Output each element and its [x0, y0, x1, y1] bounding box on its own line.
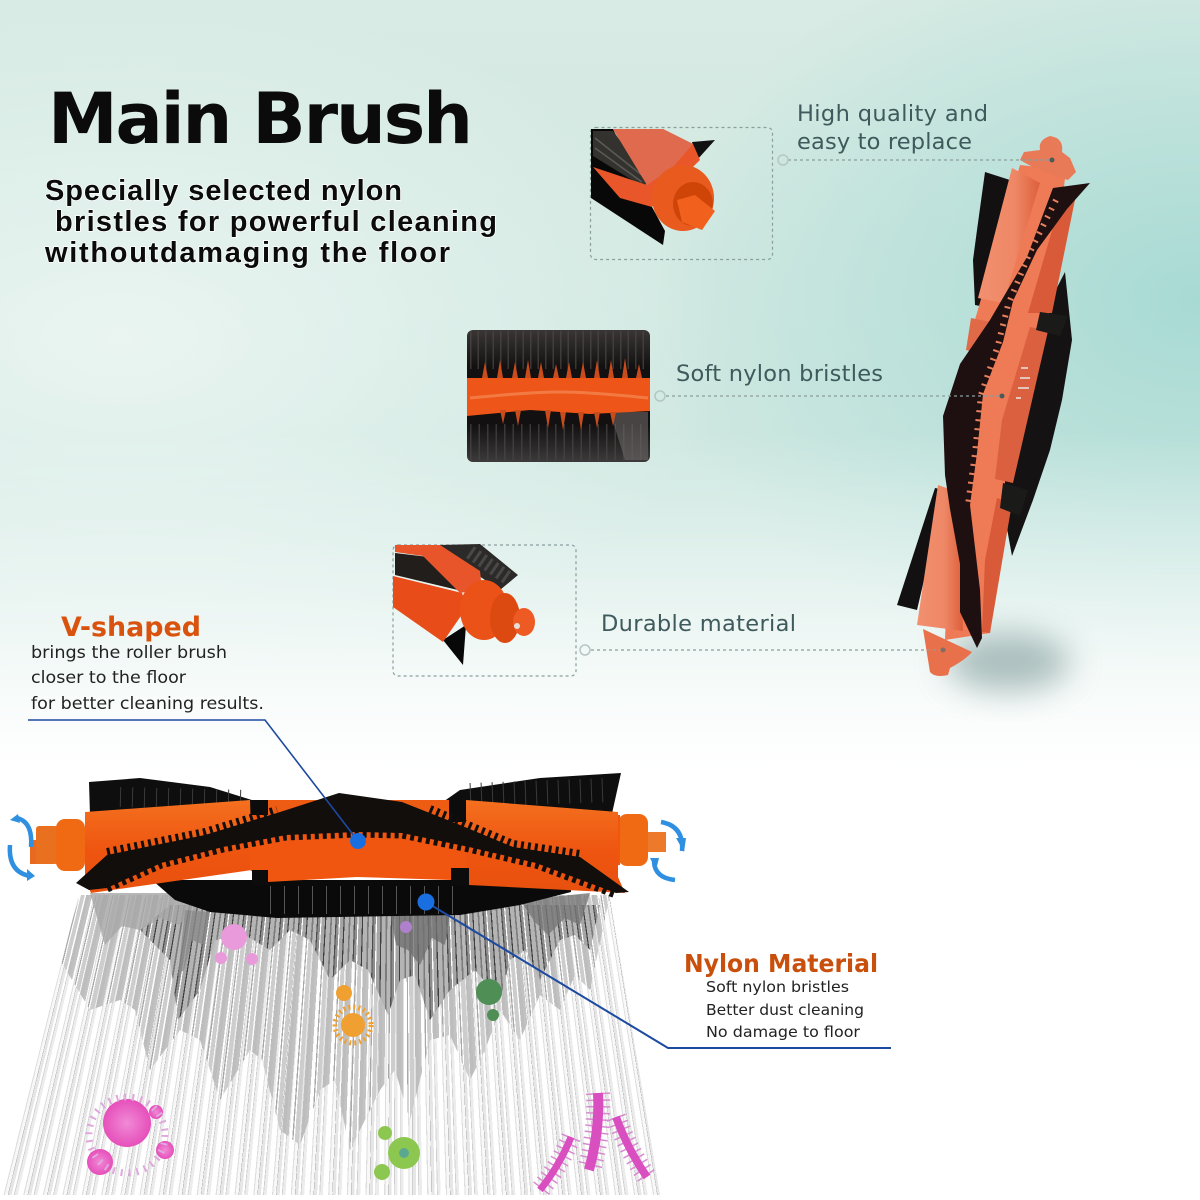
inset 3: brush end with thread [393, 544, 576, 676]
orange center shaft [250, 815, 620, 882]
right flange and nub [618, 814, 666, 866]
small white bristle gaps [1016, 368, 1030, 398]
floor streaks: light fan [0, 890, 670, 1200]
nub [677, 195, 715, 230]
subtitle text block: withoutdamaging the floor [44, 237, 450, 269]
lower spikes [500, 410, 616, 430]
upper spikes [482, 358, 642, 378]
Nylon Material callout text [684, 949, 878, 1041]
germ: light green [374, 1126, 420, 1180]
shaft [945, 165, 1066, 640]
label: high quality: easy to replace [797, 129, 972, 155]
Nylon Material callout text: No damage to floor [706, 1023, 861, 1041]
germ: pink bacteria rods [540, 1093, 647, 1190]
lower-left bristles [897, 488, 945, 610]
V bristle teeth [107, 809, 580, 854]
small left orange blade piece [966, 318, 990, 352]
orange blade [593, 129, 700, 207]
left flange and thread [30, 819, 85, 871]
flange recess [673, 182, 713, 226]
subtitle text block: bristles for powerful cleaning [55, 206, 497, 238]
orange blade left [85, 800, 252, 893]
V-shaped callout text [31, 612, 264, 714]
thread [490, 593, 520, 643]
Nylon Material callout text: Better dust cleaning [706, 1001, 864, 1019]
grey solid dust patches [90, 893, 590, 975]
blade top facet [613, 129, 693, 185]
mid right blade [995, 327, 1048, 483]
lower bristles [152, 880, 571, 918]
inset 1: brush end [590, 128, 772, 260]
inset 2: bristle closeup [467, 330, 650, 462]
far bristles [692, 140, 715, 160]
top cap [1020, 136, 1076, 180]
subtitle text block [44, 175, 497, 269]
germ: big pink [87, 1097, 174, 1175]
lower-left blade [917, 485, 963, 631]
germ: pink top cluster [215, 924, 258, 965]
upper-right blade [1028, 190, 1077, 313]
upper-right bristles [433, 773, 621, 818]
connector: durable [580, 645, 946, 655]
label: durable: Durable material [601, 611, 796, 637]
upper-left bristles [973, 172, 1010, 310]
flange [652, 165, 714, 231]
subtitle text block: Specially selected nylon [45, 175, 402, 207]
lower-right blade [982, 498, 1012, 633]
label: soft nylon: Soft nylon bristles [676, 361, 883, 387]
right bristles [1000, 272, 1072, 556]
orange top blade [395, 545, 482, 593]
back bristles [440, 544, 518, 590]
title: Main Brush [48, 78, 473, 160]
grey bristles [593, 131, 653, 185]
Nylon Material callout text: Nylon Material [684, 949, 878, 978]
Nylon Material callout text: Soft nylon bristles [706, 978, 849, 996]
orange bar [467, 378, 650, 416]
bristle connector blocks [1036, 312, 1068, 336]
shadow under vertical brush [946, 632, 1070, 692]
leader line: nylon [418, 894, 891, 1048]
connector: soft nylon [655, 391, 1004, 401]
orange lower body [393, 576, 467, 642]
orange blade right [466, 800, 625, 893]
blade gaps [252, 800, 268, 815]
black tail [443, 625, 466, 665]
upper-left bristles [89, 778, 270, 815]
horizontal brush product [30, 773, 666, 918]
rotation arrows right [650, 822, 686, 880]
black wedge [591, 129, 665, 245]
twisted bristle strip [943, 183, 1090, 648]
rotation arrows left [10, 814, 35, 881]
orange blade center-top [268, 800, 449, 830]
flange [460, 580, 508, 640]
V-shaped callout text: closer to the floor [31, 668, 186, 688]
V-shaped callout text: for better cleaning results. [31, 694, 264, 714]
V-shaped callout text: V-shaped [61, 612, 201, 643]
front bristles [395, 553, 462, 591]
V-shaped callout text: brings the roller brush [31, 643, 227, 663]
germ: dark green [476, 979, 502, 1021]
nub [513, 608, 535, 636]
label: high quality [797, 101, 988, 155]
connector: high quality [778, 155, 1054, 165]
floor streaks: dark fan [140, 905, 600, 1020]
bottom cap [923, 629, 972, 676]
germ: orange [335, 985, 371, 1043]
floor streaks: mid fan [62, 895, 610, 1150]
germ: purple [400, 921, 412, 933]
label: high quality: High quality and [797, 101, 988, 127]
V bristle band [76, 793, 629, 893]
upper-left blade [978, 168, 1040, 303]
vertical brush product [897, 136, 1090, 676]
leader line: V-shaped [28, 720, 366, 849]
